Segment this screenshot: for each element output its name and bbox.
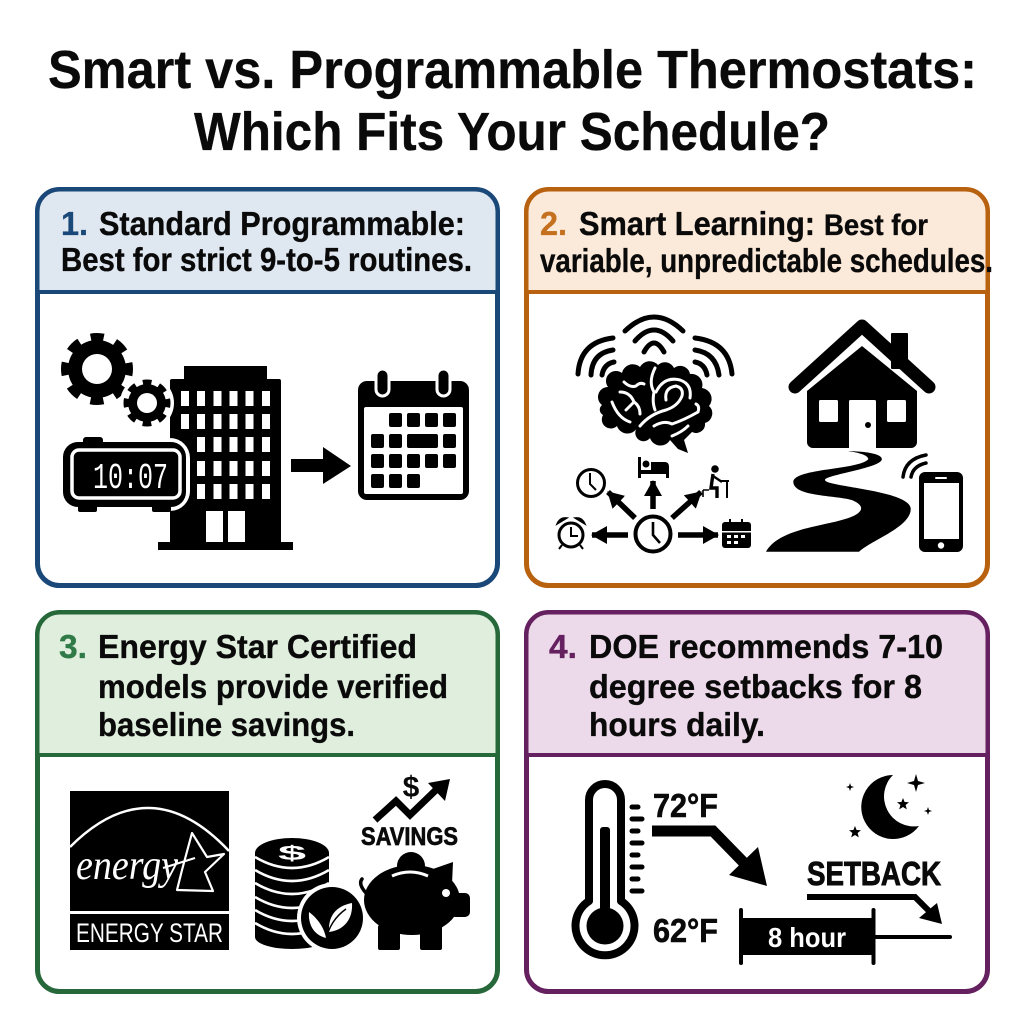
text: 62°F: 62°F xyxy=(653,912,718,949)
panel: standard programmable xyxy=(38,190,498,586)
icon: coin stack xyxy=(255,838,329,949)
icon: large gear xyxy=(65,337,129,401)
panel 4 heading: 4. xyxy=(549,628,577,665)
icon: winding road xyxy=(766,451,911,552)
icon: energy star logo: ENERGY STAR xyxy=(76,918,223,948)
icon: clock xyxy=(578,470,604,496)
icon: energy star logo: energy xyxy=(76,843,178,889)
icon: leaf badge xyxy=(297,883,367,953)
panel 1 heading: Standard Programmable: xyxy=(99,205,465,242)
icon: house xyxy=(795,326,929,449)
panel 4 heading: degree setbacks for 8 xyxy=(589,668,922,705)
title: Which Fits Your Schedule? xyxy=(194,102,830,162)
icon: bed xyxy=(638,457,669,478)
panel: energy star xyxy=(38,612,498,992)
icon: wifi signals around brain xyxy=(578,317,732,375)
icon: digital alarm clock xyxy=(60,437,190,512)
icon: rising trend arrow with dollar xyxy=(375,771,450,820)
timeline bar: 8 hour xyxy=(741,910,950,963)
panel 3 heading: Energy Star Certified xyxy=(98,628,417,665)
icon: calendar xyxy=(358,369,469,500)
icon: piggy bank xyxy=(361,852,470,950)
panel 3 heading: models provide verified xyxy=(98,668,448,705)
icon: central clock with arrows xyxy=(592,481,718,552)
panel 1 heading: 1. xyxy=(61,205,88,242)
icon: digital alarm clock: 10:07 xyxy=(93,458,168,499)
icon: coin stack: $ xyxy=(278,843,306,865)
icon: office building xyxy=(158,366,293,550)
icon: energy star logo xyxy=(70,791,229,950)
icon: smartphone xyxy=(903,455,963,552)
icon: rising trend arrow with dollar: $ xyxy=(403,771,420,804)
panel 2 heading: 2. xyxy=(540,205,567,242)
text: setback: SETBACK xyxy=(807,855,941,892)
panel 2 heading xyxy=(540,205,993,279)
timeline bar: 8 hour: 8 hour xyxy=(768,922,846,953)
title: Smart vs. Programmable Thermostats: xyxy=(48,40,977,100)
title xyxy=(48,40,977,162)
icon: small gear xyxy=(120,376,174,430)
icon: brain xyxy=(598,361,712,453)
panel: doe setbacks xyxy=(526,612,988,992)
panel 2 heading: Best for xyxy=(824,209,928,242)
panel 3 heading: 3. xyxy=(59,628,87,665)
panel 4 heading xyxy=(549,628,943,743)
panel 1 heading xyxy=(61,205,472,278)
arrow: building to calendar xyxy=(291,447,351,484)
icon: moon and stars xyxy=(846,774,932,839)
panel: smart learning xyxy=(526,190,993,586)
arrow: setback xyxy=(807,897,942,924)
panel 2 heading: Smart Learning: xyxy=(579,205,815,242)
panel 4 heading: hours daily. xyxy=(589,706,765,743)
icon: person at desk xyxy=(703,465,729,498)
icon: small calendar xyxy=(722,519,751,548)
panel 3 heading: baseline savings. xyxy=(98,706,355,743)
panel 3 heading xyxy=(59,628,448,743)
text: savings: SAVINGS xyxy=(361,823,458,851)
arrow: temperature drop xyxy=(652,831,767,886)
text: 72°F: 72°F xyxy=(653,787,718,824)
icon: alarm clock xyxy=(557,518,585,549)
icon: thermometer xyxy=(576,784,642,955)
panel 1 heading: Best for strict 9-to-5 routines. xyxy=(61,241,472,278)
panel 4 heading: DOE recommends 7-10 xyxy=(589,628,943,665)
